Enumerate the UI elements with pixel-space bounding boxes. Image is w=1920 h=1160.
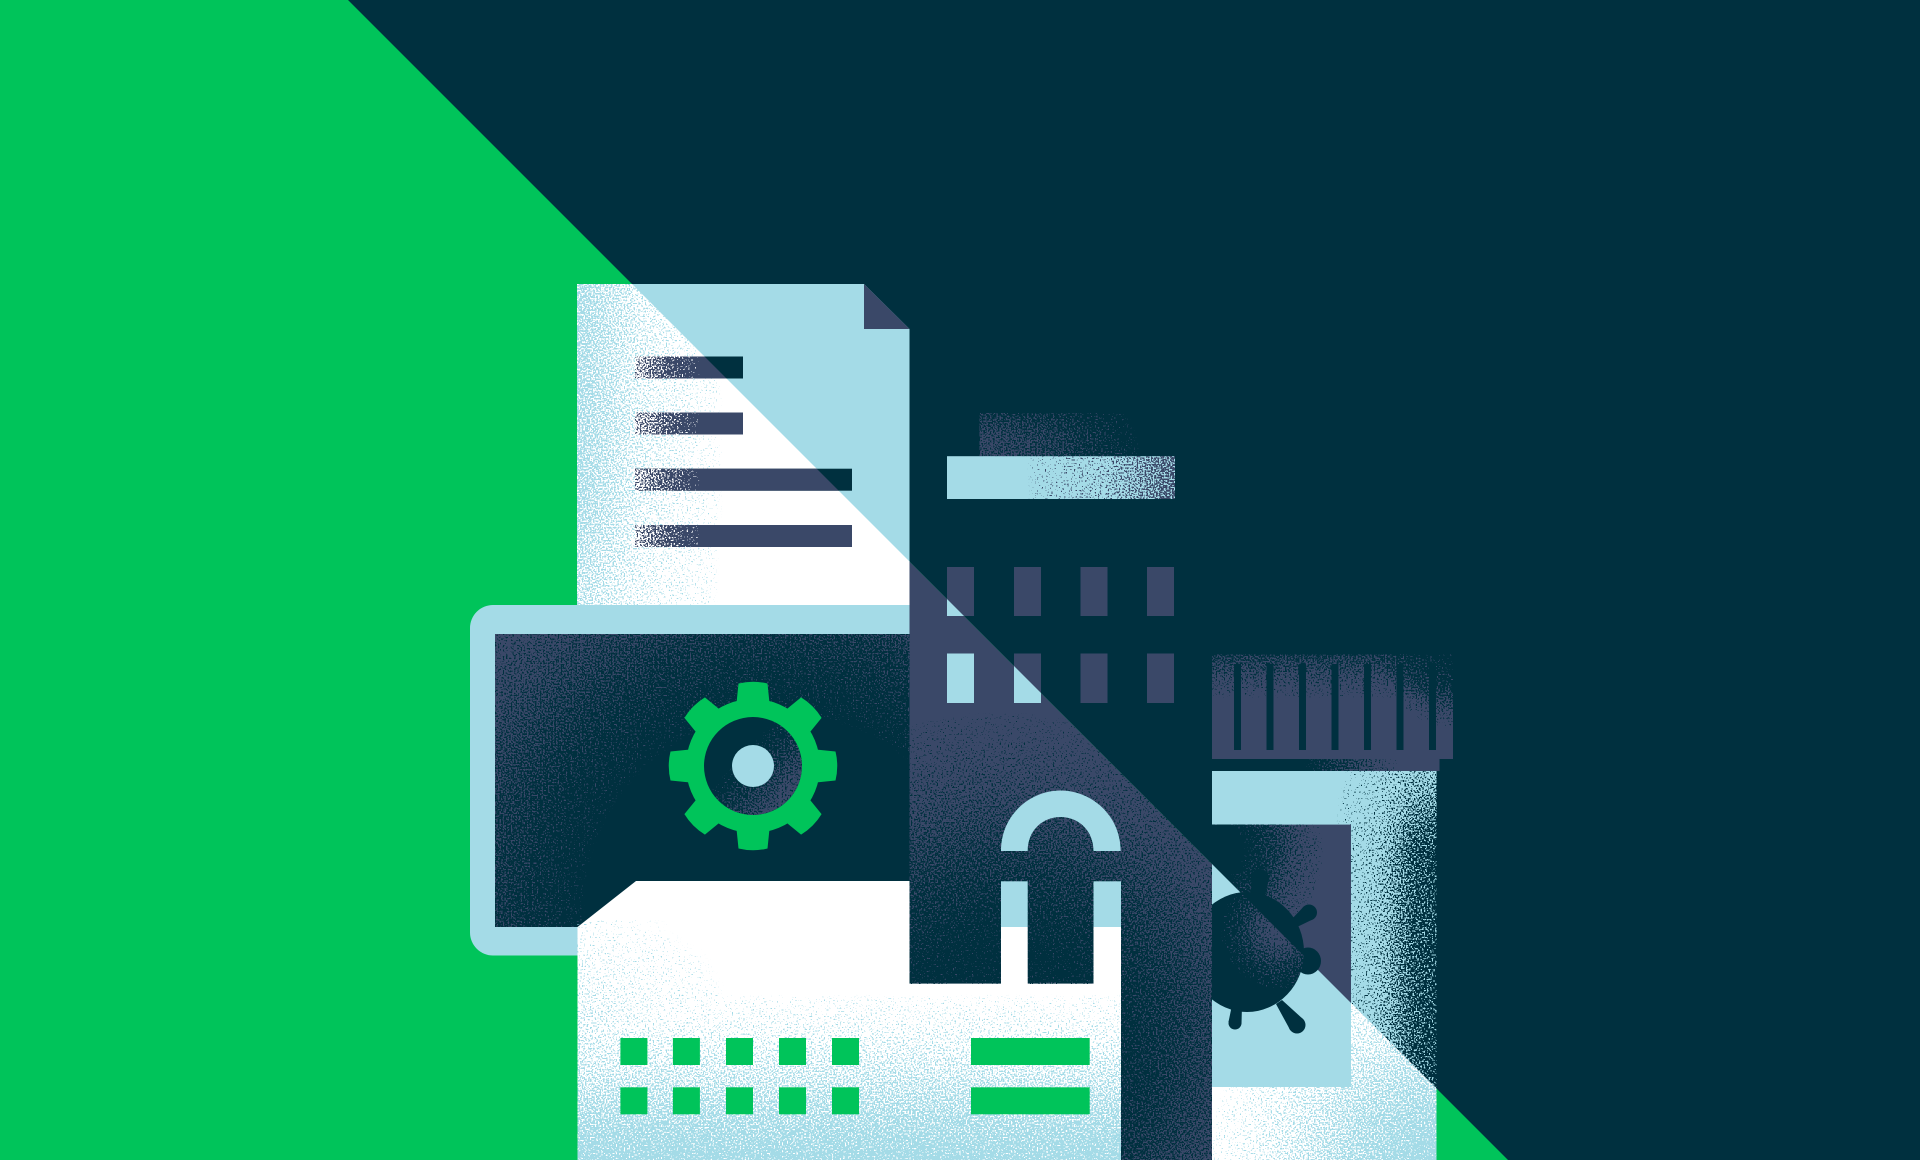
- gear hole: [704, 717, 802, 815]
- roof bar: [947, 456, 1175, 499]
- arch right leg: [1094, 881, 1121, 984]
- page folded corner: [864, 284, 910, 329]
- page lit half with stipple: [577, 284, 910, 605]
- screen frame: [470, 605, 910, 956]
- jar label: [1212, 825, 1351, 1087]
- jar body shaded stipple: [1325, 771, 1436, 1160]
- gear hole stipple: [704, 717, 802, 815]
- lid band: [1212, 759, 1440, 771]
- green bars: [971, 1038, 1090, 1114]
- screen inner: [495, 634, 910, 927]
- bug body stipple: [1218, 868, 1342, 992]
- jar body lit half: [1212, 771, 1436, 1160]
- icon: gear: [669, 682, 837, 850]
- roof bar stipple: [947, 456, 1175, 499]
- icon: bug: [1190, 868, 1342, 1034]
- lid ribs: [1234, 664, 1436, 750]
- page text lines: [635, 356, 852, 547]
- bug head: [1295, 948, 1321, 974]
- page sheet: [577, 284, 910, 605]
- building: [910, 413, 1212, 1160]
- windows: [947, 567, 1174, 703]
- base body: [578, 881, 1121, 1160]
- gear hub: [732, 745, 774, 787]
- bug body: [1190, 892, 1304, 1012]
- screen stipple: [495, 634, 910, 927]
- background: green lower-left triangle: [0, 0, 1508, 1160]
- jar body: [1212, 771, 1436, 1160]
- jar lid stipple: [1212, 654, 1453, 759]
- folder / screen panel: [470, 605, 910, 956]
- building lit body: [910, 500, 1212, 1160]
- gear teeth: [669, 682, 837, 850]
- printer / white base: [578, 881, 1121, 1160]
- base stipple left: [578, 920, 724, 1081]
- document page: [577, 284, 910, 605]
- arch left leg: [1001, 881, 1028, 984]
- arch top: [1001, 790, 1121, 851]
- bug legs: [1228, 869, 1317, 1034]
- base stipple bottom: [578, 985, 1121, 1160]
- jar: [1190, 654, 1453, 1160]
- roof chimney stipple: [980, 413, 1142, 456]
- gear ring: [686, 699, 820, 833]
- green square buttons: [620, 1038, 859, 1114]
